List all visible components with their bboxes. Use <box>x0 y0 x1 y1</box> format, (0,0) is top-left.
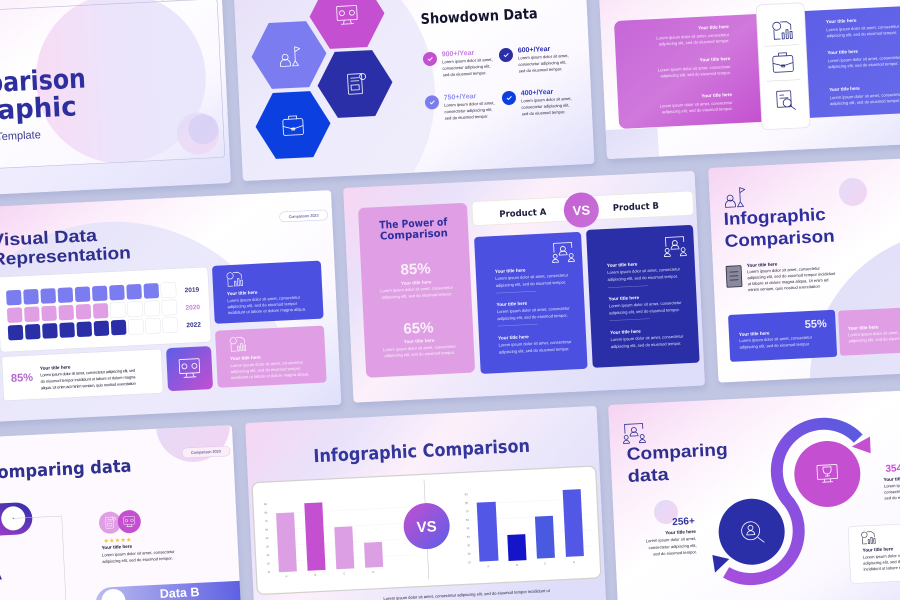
VS badge: VS <box>572 202 591 218</box>
right bar chart: 50 <box>466 526 470 530</box>
stat 256+ <box>645 516 697 557</box>
panel: the power of comparison: Lorem ipsum dolor sit amet, consectetur <box>383 344 457 352</box>
right bar chart: A <box>487 564 489 568</box>
left bar chart: 50 <box>266 536 269 540</box>
chart panel <box>252 466 601 595</box>
panel: the power of comparison: 65% <box>403 319 434 338</box>
pink panel: Your title here <box>701 92 733 98</box>
text block: Lorem ipsum dolor sit amet, consectetur <box>102 549 175 558</box>
pink card <box>838 306 900 356</box>
white card: Your title here <box>862 546 894 553</box>
slide: infographic comparison right <box>708 149 900 542</box>
waffle chart panel: 2022 <box>186 322 201 329</box>
pink panel <box>614 14 769 129</box>
stat panel 85%: Lorem ipsum dolor sit amet, consectetur adipiscing elit, sed <box>40 368 136 377</box>
panel: product A: Your title here <box>495 267 526 274</box>
left bar chart: 70 <box>265 519 268 523</box>
star rating: ★★★★★ <box>103 537 132 545</box>
panel: product B: adipiscing elit, sed do eiusmod tempor. <box>609 307 680 315</box>
stat 256+: Your title here <box>665 529 696 535</box>
glass panel frame <box>0 0 225 175</box>
panel: product A: Your title here <box>496 301 528 307</box>
pink panel: Lorem ipsum dolor sit amet, consectetur <box>656 32 730 41</box>
title: data <box>627 464 669 486</box>
stat 256+: 256+ <box>672 516 695 528</box>
small orb overlay <box>188 114 219 145</box>
data A pill <box>0 500 68 600</box>
paired circle icons <box>98 510 141 535</box>
panel: product B: Your title here <box>607 261 638 268</box>
blue card 55% <box>728 310 837 362</box>
pink info card: Your title here <box>230 355 261 361</box>
blue card 55%: 55% <box>804 318 827 331</box>
left bar chart: 80 <box>264 510 268 515</box>
slide: comparison infographic cover <box>0 0 232 205</box>
blue card 55%: Lorem ipsum dolor sit amet, consectetur <box>739 335 813 343</box>
panel: the power of comparison <box>358 203 475 378</box>
left bar chart: D <box>372 570 375 574</box>
title <box>626 439 729 486</box>
header bar product A and B <box>472 191 694 226</box>
icon: clipboard <box>726 266 742 287</box>
panel: the power of comparison: Your title here <box>404 338 435 344</box>
text block <box>747 259 837 292</box>
text block: Your title here <box>747 262 778 268</box>
pink info card <box>215 326 327 388</box>
corner blob <box>154 386 232 464</box>
stat 900+/Year: consectetur adipiscing elit, <box>442 64 491 71</box>
pink info card: incididunt ut labore et dolore magna aliqua. <box>231 371 309 380</box>
badge <box>182 446 230 458</box>
panel: the power of comparison: adipiscing elit, sed do eiusmod tempor. <box>381 291 452 300</box>
slide: product A vs product B <box>343 171 706 407</box>
icon tile monitor <box>166 346 213 391</box>
navy circle <box>717 497 786 566</box>
stat panel 85%: Your title here <box>40 364 71 371</box>
blue panel: Your title here <box>827 49 859 55</box>
right bar chart: 30 <box>467 543 471 547</box>
stat panel 85%: 85% <box>11 372 34 385</box>
text block <box>101 542 176 564</box>
pink info card: adipiscing elit, sed do eiusmod tempor <box>231 366 301 374</box>
stat 900+/Year: sed do eiusmod tempor. <box>443 70 487 77</box>
pink panel: adipiscing elit, sed do eiusmod tempor. <box>660 70 731 78</box>
hexagon navy <box>316 49 394 119</box>
pink panel: adipiscing elit, sed do eiusmod tempor. <box>659 38 729 46</box>
header bar product A and B: Product B <box>613 202 659 214</box>
stat 600+/Year: sed do eiusmod tempor. <box>519 66 563 73</box>
stat 256+: consectetur adipiscing elit, <box>648 543 697 550</box>
stat panel 85%: aliqua. Ut enim ad minim veniam, quis nostrud exercitation <box>41 381 137 390</box>
left bar chart: C <box>343 571 346 575</box>
pink panel: Lorem ipsum dolor sit amet, consectetur <box>658 64 731 73</box>
stat 750+/Year: sed do eiusmod tempor. <box>445 114 489 121</box>
pink panel: Lorem ipsum dolor sit amet, consectetur <box>660 100 733 109</box>
hexagon pink <box>308 0 386 50</box>
right bar chart: D <box>573 560 575 564</box>
panel: product A: adipiscing elit, sed do eiusmod tempor. <box>499 346 569 355</box>
blue panel: Your title here <box>829 86 860 92</box>
white card <box>848 521 900 584</box>
corner glow <box>606 128 659 159</box>
footer band <box>0 162 229 194</box>
slide: infographic comparison bar charts <box>245 406 608 600</box>
blue panel: adipiscing elit, sed do eiusmod tempor. <box>827 30 897 38</box>
background circle <box>0 222 293 422</box>
left bar chart: 60 <box>265 527 269 532</box>
right bar chart: 60 <box>466 518 470 522</box>
panel: product A: Lorem ipsum dolor sit amet, consectetur <box>498 339 572 348</box>
panel: the power of comparison: The Power of <box>379 216 448 232</box>
panel: the power of comparison: Comparison <box>380 227 448 243</box>
stat 750+/Year: Lorem ipsum dolor sit amet, <box>444 100 495 108</box>
blue info card: incididunt ut labore et dolore magna aliqua. <box>228 306 306 315</box>
stat panel 85% <box>2 349 163 401</box>
panel: the power of comparison: 85% <box>400 260 431 279</box>
title: Infographic <box>723 204 826 229</box>
blue card 55%: Your title here <box>739 330 770 337</box>
pink card: Your title here <box>848 324 879 331</box>
stat 600+/Year: 600+/Year <box>518 46 551 54</box>
badge: Comparison 2023 <box>191 450 221 455</box>
stat 400+/Year <box>502 90 572 116</box>
header bar product A and B: Product A <box>499 208 547 220</box>
badge <box>279 210 328 222</box>
panel: product B: Your title here <box>608 295 640 301</box>
blue panel: adipiscing elit, sed do eiusmod tempor. <box>828 61 899 69</box>
waffle chart panel: 2020 <box>185 304 201 312</box>
title <box>723 204 835 251</box>
stat 400+/Year: Lorem ipsum dolor sit amet, <box>521 96 572 103</box>
right bar chart: 20 <box>468 552 471 556</box>
slide: two column with icon strip <box>596 0 900 163</box>
blue panel: Lorem ipsum dolor sit amet, consectetur <box>826 24 900 32</box>
icon: person with flag <box>725 187 746 207</box>
text block: adipiscing elit, sed do eiusmod tempor incididunt <box>747 271 836 280</box>
stat 400+/Year: consectetur adipiscing elit, <box>521 103 570 110</box>
background circle <box>803 223 900 537</box>
panel: product A: adipiscing elit, sed do eiusmod tempor. <box>497 313 568 321</box>
heading: Showdown Data <box>420 6 538 28</box>
stat 400+/Year: sed do eiusmod tempor. <box>522 109 566 116</box>
title: Infographic Comparison <box>313 436 530 467</box>
panel: product B: Your title here <box>610 329 641 335</box>
blue info card: Your title here <box>227 290 258 296</box>
slide: comparing data left <box>0 385 258 600</box>
blue panel: Your title here <box>826 18 857 24</box>
VS badge <box>403 502 451 550</box>
VS badge <box>563 192 600 228</box>
blue card 55%: adipiscing elit, sed do eiusmod tempor <box>739 341 810 350</box>
panel: product A: adipiscing elit, sed do eiusmod tempor. <box>496 280 566 288</box>
panel: product A: Lorem ipsum dolor sit amet, consectetur <box>495 272 569 281</box>
panel: product B: adipiscing elit, sed do eiusmod tempor. <box>611 341 681 349</box>
S-curve arrow <box>706 421 877 581</box>
right bar chart: 90 <box>465 492 468 496</box>
blue panel: adipiscing elit, sed do eiusmod tempor. <box>830 98 900 106</box>
VS badge: VS <box>416 518 437 536</box>
text block: minim veniam, quis nostrud exercitation <box>748 284 821 292</box>
stat panel 85%: do eiusmod tempor incididunt ut labore et dolore magna <box>40 374 136 384</box>
panel: product A <box>474 232 588 374</box>
text block: adipiscing elit, sed do eiusmod tempor. <box>102 556 173 564</box>
panel: product B: Lorem ipsum dolor sit amet, consectetur <box>610 334 684 342</box>
waffle chart panel: 2019 <box>185 287 200 294</box>
data B pill <box>95 580 258 600</box>
left bar chart: 20 <box>267 561 270 566</box>
blue panel <box>800 4 900 118</box>
right bar chart: C <box>544 561 546 566</box>
decorative orb <box>838 177 868 207</box>
right bar chart: 80 <box>465 501 469 505</box>
panel: product B <box>586 225 700 368</box>
stat 354+ <box>883 462 900 501</box>
left bar chart: A <box>285 574 288 578</box>
hexagon lavender <box>250 20 328 90</box>
background circle <box>234 0 435 181</box>
stat 600+/Year <box>498 46 568 72</box>
stat 600+/Year: consectetur adipiscing elit, <box>518 60 567 67</box>
stat 900+/Year: Lorem ipsum dolor sit amet, <box>442 57 493 64</box>
right bar chart: 70 <box>465 509 469 513</box>
left bar chart: 40 <box>266 544 270 549</box>
pink panel: Your title here <box>698 24 729 31</box>
stat 750+/Year: consectetur adipiscing elit, <box>444 107 493 114</box>
icon: people and document <box>623 423 645 443</box>
stat 900+/Year <box>423 50 492 76</box>
panel: the power of comparison: adipiscing elit, sed do eiusmod tempor. <box>384 350 455 358</box>
title: Comparison <box>724 226 835 251</box>
blue info card <box>212 261 324 324</box>
pink circle <box>793 439 862 509</box>
pink info card: Lorem ipsum dolor sit amet, consectetur <box>230 360 304 368</box>
right bar chart: 40 <box>467 535 470 539</box>
icon strip <box>756 3 810 130</box>
pink panel: Your title here <box>700 56 731 62</box>
blue info card: Lorem ipsum dolor sit amet, consectetur <box>227 295 301 303</box>
panel: product A: Your title here <box>498 334 529 341</box>
right bar chart: 10 <box>468 560 472 564</box>
decorative orb <box>653 499 679 525</box>
text block: ut labore et dolore magna aliqua. Ut enim ad <box>748 277 829 286</box>
slide: comparing data right <box>608 388 900 600</box>
text block: Your title here <box>101 544 133 550</box>
blue info card: adipiscing elit, sed do eiusmod tempor <box>227 301 298 309</box>
pink panel: adipiscing elit, sed do eiusmod tempor. <box>662 106 733 114</box>
blue panel: Lorem ipsum dolor sit amet, consectetur <box>828 55 900 63</box>
left bar chart: 90 <box>264 502 268 506</box>
right bar chart <box>464 486 592 569</box>
stat 600+/Year: Lorem ipsum dolor sit amet, <box>518 53 569 60</box>
text block: Lorem ipsum dolor sit amet, consectetur <box>747 266 821 274</box>
left bar chart: 10 <box>267 570 271 574</box>
panel: the power of comparison: Lorem ipsum dolor sit amet, consectetur <box>380 285 454 293</box>
top pill <box>161 0 187 1</box>
stat 256+: sed do eiusmod tempor. <box>653 549 697 556</box>
hexagon blue <box>254 90 332 160</box>
slide: showdown data <box>234 0 596 185</box>
stat 750+/Year <box>425 94 494 120</box>
left bar chart <box>264 495 414 579</box>
stat 900+/Year: 900+/Year <box>442 50 475 58</box>
slide: visual data representation <box>0 190 342 426</box>
waffle chart panel <box>0 267 211 352</box>
badge: Comparison 2023 <box>289 214 319 219</box>
left bar chart: B <box>314 573 317 577</box>
panel: product B: Lorem ipsum dolor sit amet, consectetur <box>609 300 682 308</box>
right bar chart: B <box>516 563 518 567</box>
decorative large orb <box>32 0 210 167</box>
small orb <box>176 112 220 156</box>
panel: product B: Lorem ipsum dolor sit amet, consectetur <box>607 266 681 275</box>
stat 750+/Year: 750+/Year <box>444 93 477 102</box>
left bar chart: 30 <box>266 553 270 557</box>
panel: product A: Lorem ipsum dolor sit amet, consectetur <box>497 306 570 314</box>
panel: the power of comparison: Your title here <box>401 279 432 286</box>
stat 256+: Lorem ipsum dolor sit amet, <box>646 536 696 543</box>
stat 400+/Year: 400+/Year <box>521 89 554 97</box>
panel: product B: adipiscing elit, sed do eiusmod tempor. <box>607 274 678 282</box>
title <box>0 230 130 268</box>
title: Comparing <box>626 439 728 464</box>
